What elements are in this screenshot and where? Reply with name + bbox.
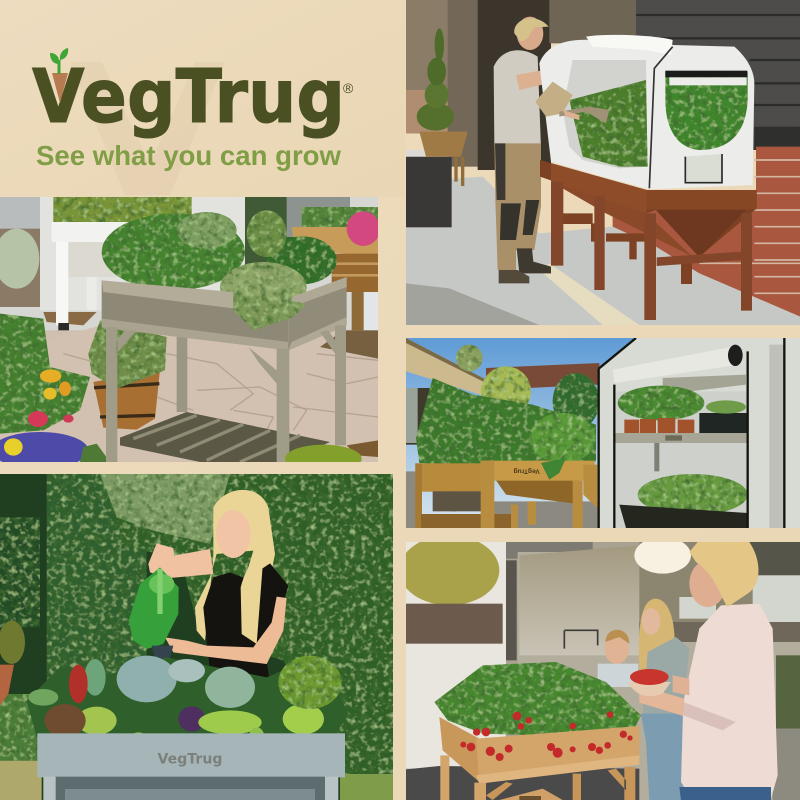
blue-grey planter bbox=[37, 733, 345, 800]
patio floor bbox=[406, 177, 800, 325]
flower garden bbox=[0, 314, 110, 469]
wooden V planter bbox=[540, 160, 757, 320]
grey table planter with herbs bbox=[102, 210, 347, 462]
brick wall bbox=[613, 147, 800, 317]
wooden deck bbox=[406, 766, 639, 800]
rolled cover bbox=[613, 346, 739, 383]
wooden strawberry planter bbox=[439, 717, 639, 800]
building with roof bbox=[406, 338, 599, 445]
man bbox=[494, 16, 551, 284]
panel: logo bbox=[0, 0, 405, 197]
patio paving bbox=[43, 312, 378, 457]
left shrubs and grass bbox=[0, 517, 393, 800]
panel: photo of planters and mini greenhouse bbox=[406, 338, 800, 528]
boy bbox=[598, 630, 638, 687]
window frame bbox=[506, 542, 800, 800]
girl bbox=[639, 599, 689, 800]
panel: photo of woman watering planter bbox=[0, 474, 393, 800]
logo wordmark: VegTrug bbox=[32, 54, 345, 140]
icon: seedling in carrot bbox=[50, 48, 68, 103]
white wall bbox=[406, 542, 506, 769]
leafy tree bbox=[100, 474, 393, 774]
seedlings on shelf bbox=[618, 386, 704, 420]
wooden barrel with plants bbox=[88, 320, 167, 430]
planter brand: VegTrug bbox=[514, 467, 540, 474]
white flowers against wall bbox=[0, 229, 40, 307]
background wooden planter with pink flowers bbox=[292, 207, 380, 330]
window reflections bbox=[634, 537, 800, 800]
planter brand: VegTrug bbox=[157, 751, 222, 767]
foliage in foreground bbox=[285, 444, 362, 462]
hedge bbox=[47, 474, 147, 687]
ground bbox=[406, 471, 598, 528]
woman in pink top bbox=[628, 542, 778, 800]
watering can bbox=[535, 82, 609, 123]
topiary in planter bbox=[417, 28, 468, 186]
black wicker box bbox=[406, 150, 452, 227]
panel: photo of family with strawberry planter bbox=[399, 535, 800, 800]
bamboo bbox=[399, 535, 499, 605]
tagline: See what you can grow bbox=[36, 140, 341, 171]
strawberry plants bbox=[434, 662, 641, 745]
registered mark: ® bbox=[343, 80, 354, 96]
panel: photo of grey wooden planter on patio bbox=[0, 197, 380, 473]
strawberries bbox=[460, 711, 633, 761]
wooden raised planters bbox=[415, 458, 597, 528]
woman bbox=[148, 490, 288, 684]
lower tray plants bbox=[638, 474, 746, 512]
panel: photo of man with greenhouse planter bbox=[406, 0, 800, 325]
vegetables in planter bbox=[27, 654, 348, 746]
background white planter bbox=[52, 197, 192, 330]
trees and tomato plants bbox=[416, 345, 599, 466]
building walls bbox=[406, 0, 800, 170]
dark planter box on wall bbox=[406, 604, 503, 644]
mini greenhouse bbox=[599, 338, 800, 528]
table planter legs bbox=[106, 325, 346, 462]
greenhouse cover bbox=[539, 35, 754, 189]
green watering can bbox=[129, 567, 179, 664]
